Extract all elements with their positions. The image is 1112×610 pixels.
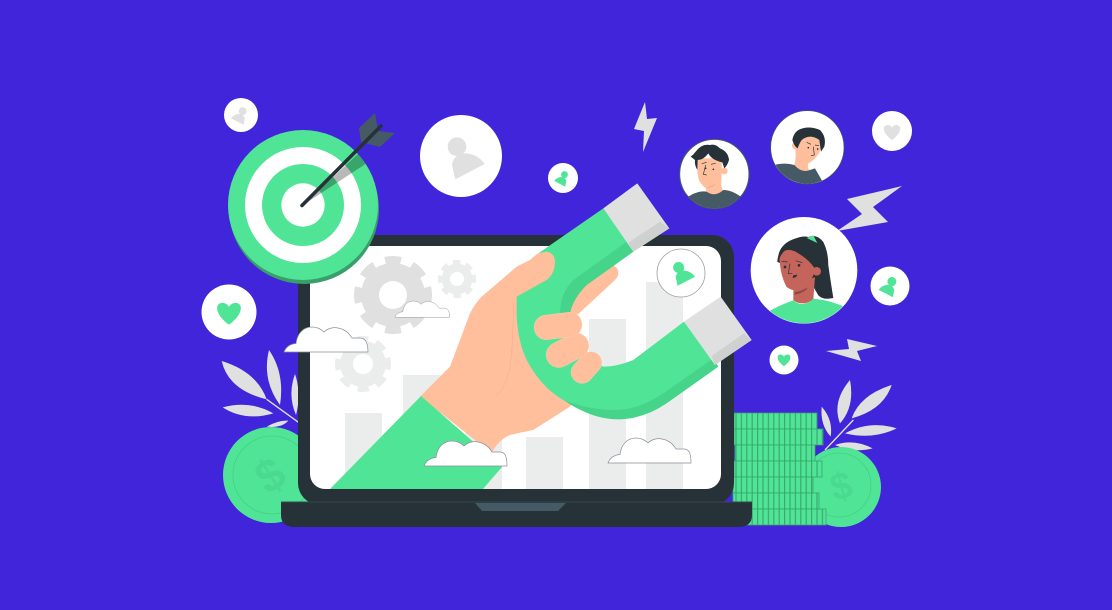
- right coin: [801, 447, 881, 527]
- heart badge: left: [202, 284, 256, 340]
- laptop base: [281, 502, 752, 527]
- coin stack: [733, 413, 826, 525]
- laptop notch: [475, 503, 566, 511]
- right plant leaves: [821, 380, 897, 450]
- laptop: [281, 235, 752, 527]
- lightning bolts: [634, 102, 902, 361]
- person badge: top left: [224, 98, 258, 132]
- laptop lid: [298, 235, 734, 505]
- large gear: [358, 260, 428, 330]
- person badge: right green: [870, 266, 910, 306]
- index finger: [568, 265, 618, 315]
- left plant leaves: [222, 350, 299, 427]
- left coin: [223, 427, 319, 523]
- customer: man one: [680, 139, 749, 215]
- laptop screen: [310, 246, 721, 489]
- illustration: magnet attracting customers: [202, 98, 912, 527]
- magnet: [517, 183, 752, 419]
- sleeve: [330, 396, 502, 489]
- arrow in target: [302, 113, 395, 206]
- hand holding magnet: [420, 183, 752, 453]
- right coin: $: [826, 464, 857, 510]
- heart badge: small green: [770, 346, 798, 374]
- person badge: small green: [548, 163, 578, 193]
- palm: [420, 252, 600, 453]
- customer: woman: [751, 217, 857, 325]
- heart badge: top right: [872, 111, 912, 151]
- lower gear: [338, 338, 388, 390]
- person badge: large grey: [420, 115, 502, 197]
- fingers: [533, 311, 606, 388]
- target: [228, 130, 379, 284]
- small gear: [440, 262, 474, 296]
- thumb: [514, 252, 555, 303]
- left coin: $: [245, 446, 295, 504]
- screen person badge: [657, 249, 705, 297]
- screen bar chart: [345, 282, 683, 489]
- customer: man two: [768, 111, 844, 192]
- clouds: [284, 301, 691, 466]
